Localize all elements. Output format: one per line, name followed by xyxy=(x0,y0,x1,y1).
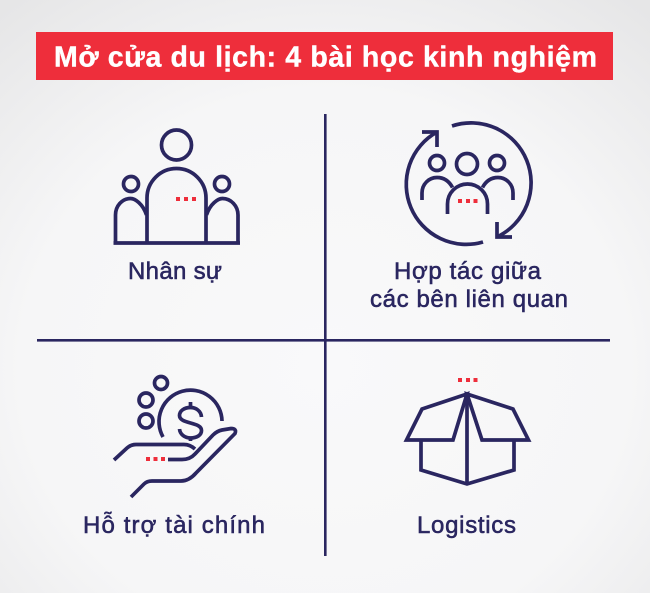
title banner xyxy=(36,32,613,80)
icon: three people xyxy=(114,130,240,243)
icon: hand with coins xyxy=(114,376,236,497)
label: Logistics: Logistics xyxy=(417,512,516,539)
panel: financial support xyxy=(83,376,265,539)
icon: open box xyxy=(406,378,528,484)
title banner: Mở cửa du lịch: 4 bài học kinh nghiệm xyxy=(54,42,597,74)
label: Nhân sự: Nhân sự xyxy=(128,258,222,285)
label: stakeholder collaboration: Hợp tác giữa xyxy=(394,258,542,285)
panel: logistics xyxy=(406,378,528,539)
label: stakeholder collaboration: các bên liên quan xyxy=(370,286,568,313)
vertical divider xyxy=(324,114,327,556)
icon: people in circular arrows xyxy=(406,123,531,244)
panel: human resources xyxy=(114,130,240,285)
label: stakeholder collaboration xyxy=(370,258,568,313)
panel: stakeholder collaboration xyxy=(370,123,568,313)
horizontal divider xyxy=(37,339,610,342)
label: financial support: Hỗ trợ tài chính xyxy=(83,512,265,539)
